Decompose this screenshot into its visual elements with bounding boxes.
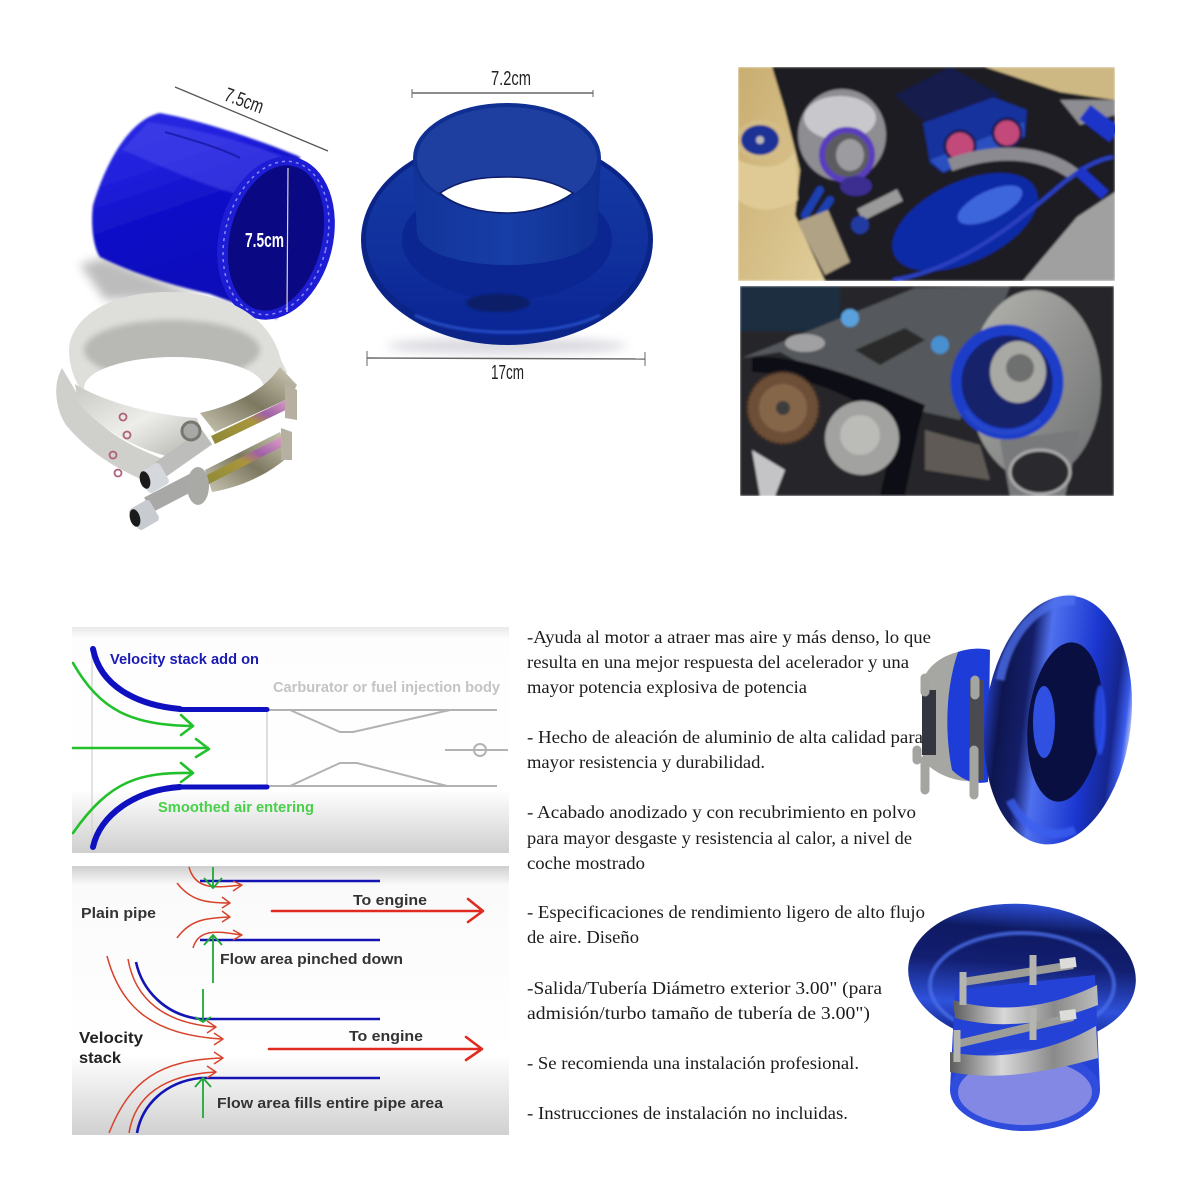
dimension: hose length 7.5cm: 7.5cm <box>221 84 266 118</box>
text block: product description: - Se recomienda una instalación profesional. <box>527 1053 859 1073</box>
text block: product description: - Instrucciones de instalación no incluidas. <box>527 1103 848 1123</box>
labels: Velocity stack add on <box>110 651 259 668</box>
green airflow arrows <box>72 663 209 833</box>
diagram: plain pipe vs velocity stack: Flow area fills entire pipe area <box>217 1095 444 1112</box>
product: silicone hose <box>80 113 351 332</box>
dimension: hose length 7.5cm <box>175 84 328 151</box>
lower clamp band <box>56 368 172 484</box>
diagram background <box>72 627 509 853</box>
blue coupler <box>950 975 1100 1090</box>
text block: product description: - Acabado anodizado y con recubrimiento en polvo <box>527 802 916 822</box>
blue silicone coupler <box>947 649 990 783</box>
dimension: stack base 17cm: 17cm <box>491 362 524 384</box>
red airflow arrows <box>107 867 242 1133</box>
upper clamp inner surface <box>69 292 287 416</box>
large red arrows to engine <box>269 899 483 1060</box>
red rivet marks <box>120 414 126 420</box>
diagram: plain pipe vs velocity stack: Flow area pinched down <box>220 951 403 968</box>
product: stack with clamps, underside view <box>903 896 1141 1131</box>
text block: product description: resulta en una mejor respuesta del acelerador y una <box>527 652 909 672</box>
upper clamp front band <box>75 384 205 458</box>
clamp bolts <box>917 678 975 795</box>
product: blue velocity stack <box>361 103 653 354</box>
text block: product description: mayor resistencia y durabilidad. <box>527 752 765 772</box>
diagram: plain pipe vs velocity stack <box>72 866 509 1135</box>
text block: product description: de aire. Diseño <box>527 927 639 947</box>
clamp bands <box>953 985 1098 1024</box>
diagram: plain pipe vs velocity stack: Velocity <box>79 1030 143 1047</box>
blue stack walls <box>93 649 267 847</box>
clamp bridge bands <box>200 367 297 432</box>
blue pipe walls <box>136 881 380 1133</box>
green flow area arrows <box>195 867 222 1118</box>
dimension: hose diameter 7.5cm: 7.5cm <box>245 230 284 252</box>
clamp bolts <box>957 965 1073 1044</box>
flared mouth <box>970 587 1146 853</box>
diagram: velocity stack add on: Smoothed air entering <box>158 799 314 816</box>
threaded rods <box>213 403 290 440</box>
text block: product description: admisión/turbo tamaño de tubería de 3.00") <box>527 1003 870 1023</box>
steel sleeve <box>923 650 985 781</box>
diagram: plain pipe vs velocity stack: To engine <box>353 892 427 909</box>
text block: product description: - Hecho de aleación de aluminio de alta calidad para <box>527 727 923 747</box>
flared mouth <box>903 896 1141 1054</box>
diagram: velocity stack add on: Carburator or fuel injection body <box>273 679 501 696</box>
throttle body outline <box>92 650 508 845</box>
bolt barrels and nuts <box>160 437 207 470</box>
text block: product description: mayor potencia explosiva de potencia <box>527 677 807 697</box>
text block: product description: -Salida/Tubería Diámetro exterior 3.00" (para <box>527 978 882 998</box>
diagram: plain pipe vs velocity stack: To engine <box>349 1028 423 1045</box>
text block: product description: coche mostrado <box>527 853 645 873</box>
text block: product description: -Ayuda al motor a atraer mas aire y más denso, lo que <box>527 627 931 647</box>
text block: product description: para mayor desgaste y resistencia al calor, a nivel de <box>527 828 912 848</box>
dimension: stack top 7.2cm: 7.2cm <box>491 68 531 90</box>
photo: turbo with blue velocity stack <box>740 286 1114 496</box>
diagram: velocity stack add on <box>72 627 509 853</box>
photo: engine bay with blue stack <box>736 67 1115 291</box>
product: steel t-bolt clamps <box>56 292 297 531</box>
text block: product description: - Especificaciones de rendimiento ligero de alto flujo <box>527 902 925 922</box>
diagram: plain pipe vs velocity stack: stack <box>79 1050 121 1067</box>
product: stack with clamps, side view <box>917 587 1146 853</box>
diagram background <box>72 866 509 1135</box>
labels: Plain pipe <box>81 905 156 922</box>
text block: product description <box>527 627 931 1123</box>
